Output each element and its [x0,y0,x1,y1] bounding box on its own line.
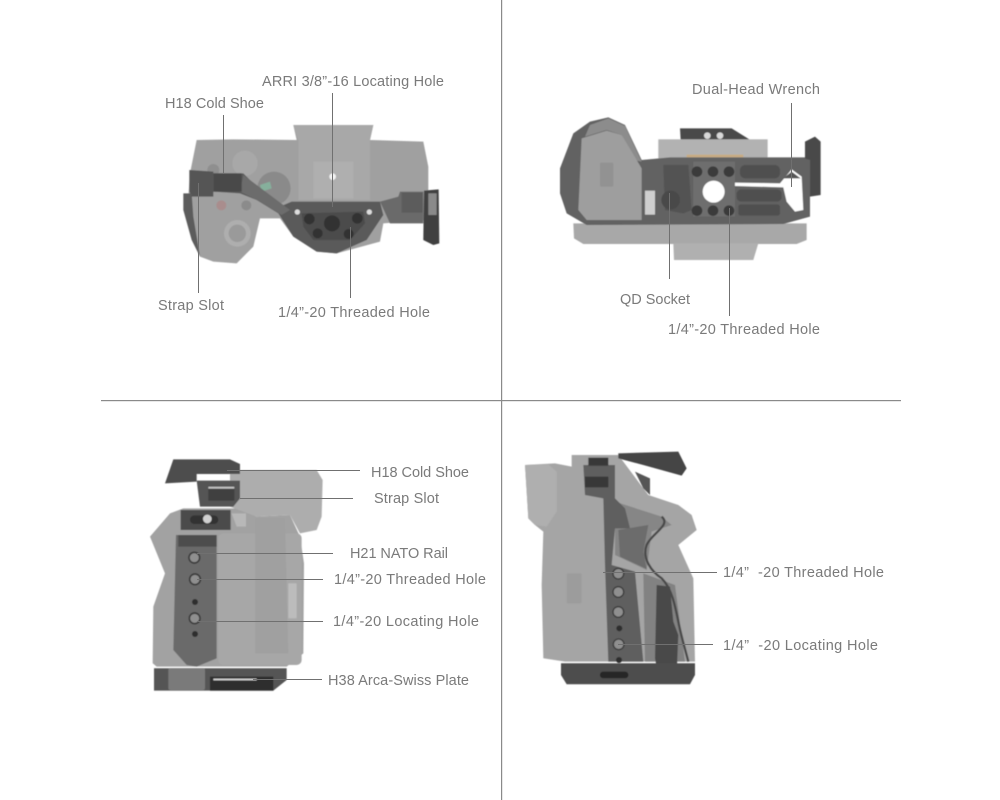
label: locating hole: 1/4” -20 Locating Hole [723,638,878,654]
vertical divider [501,0,502,800]
label: QD socket: QD Socket [620,292,690,308]
horizontal divider [101,400,901,401]
label: strap slot: Strap Slot [158,298,224,314]
label: threaded hole: 1/4”-20 Threaded Hole [334,572,486,588]
label: threaded hole: 1/4” -20 Threaded Hole [723,565,884,581]
camera and cage top view [183,125,439,263]
label: threaded hole: 1/4”-20 Threaded Hole [668,322,820,338]
label: ARRI locating hole: ARRI 3/8”-16 Locating Hole [262,74,444,90]
panel: left side view [150,459,486,691]
label: arca-swiss plate: H38 Arca-Swiss Plate [328,673,469,689]
label: strap slot: Strap Slot [374,491,439,507]
leader lines [670,103,792,316]
panel: top view [158,74,444,321]
label: threaded hole: 1/4”-20 Threaded Hole [278,305,430,321]
leader lines [197,470,360,680]
camera and cage bottom view [560,117,821,260]
label: dual-head wrench: Dual-Head Wrench [692,82,820,98]
leader lines [198,93,350,298]
panel: bottom view [560,82,821,338]
label: H18 cold shoe: H18 Cold Shoe [371,465,469,481]
camera and cage left side [150,459,323,691]
panel: right side view [525,452,884,684]
label: locating hole: 1/4”-20 Locating Hole [333,614,479,630]
leader lines [603,572,717,644]
label: H21 NATO rail: H21 NATO Rail [350,546,448,562]
camera and cage right side [525,452,697,684]
label: H18 cold shoe: H18 Cold Shoe [165,96,264,112]
